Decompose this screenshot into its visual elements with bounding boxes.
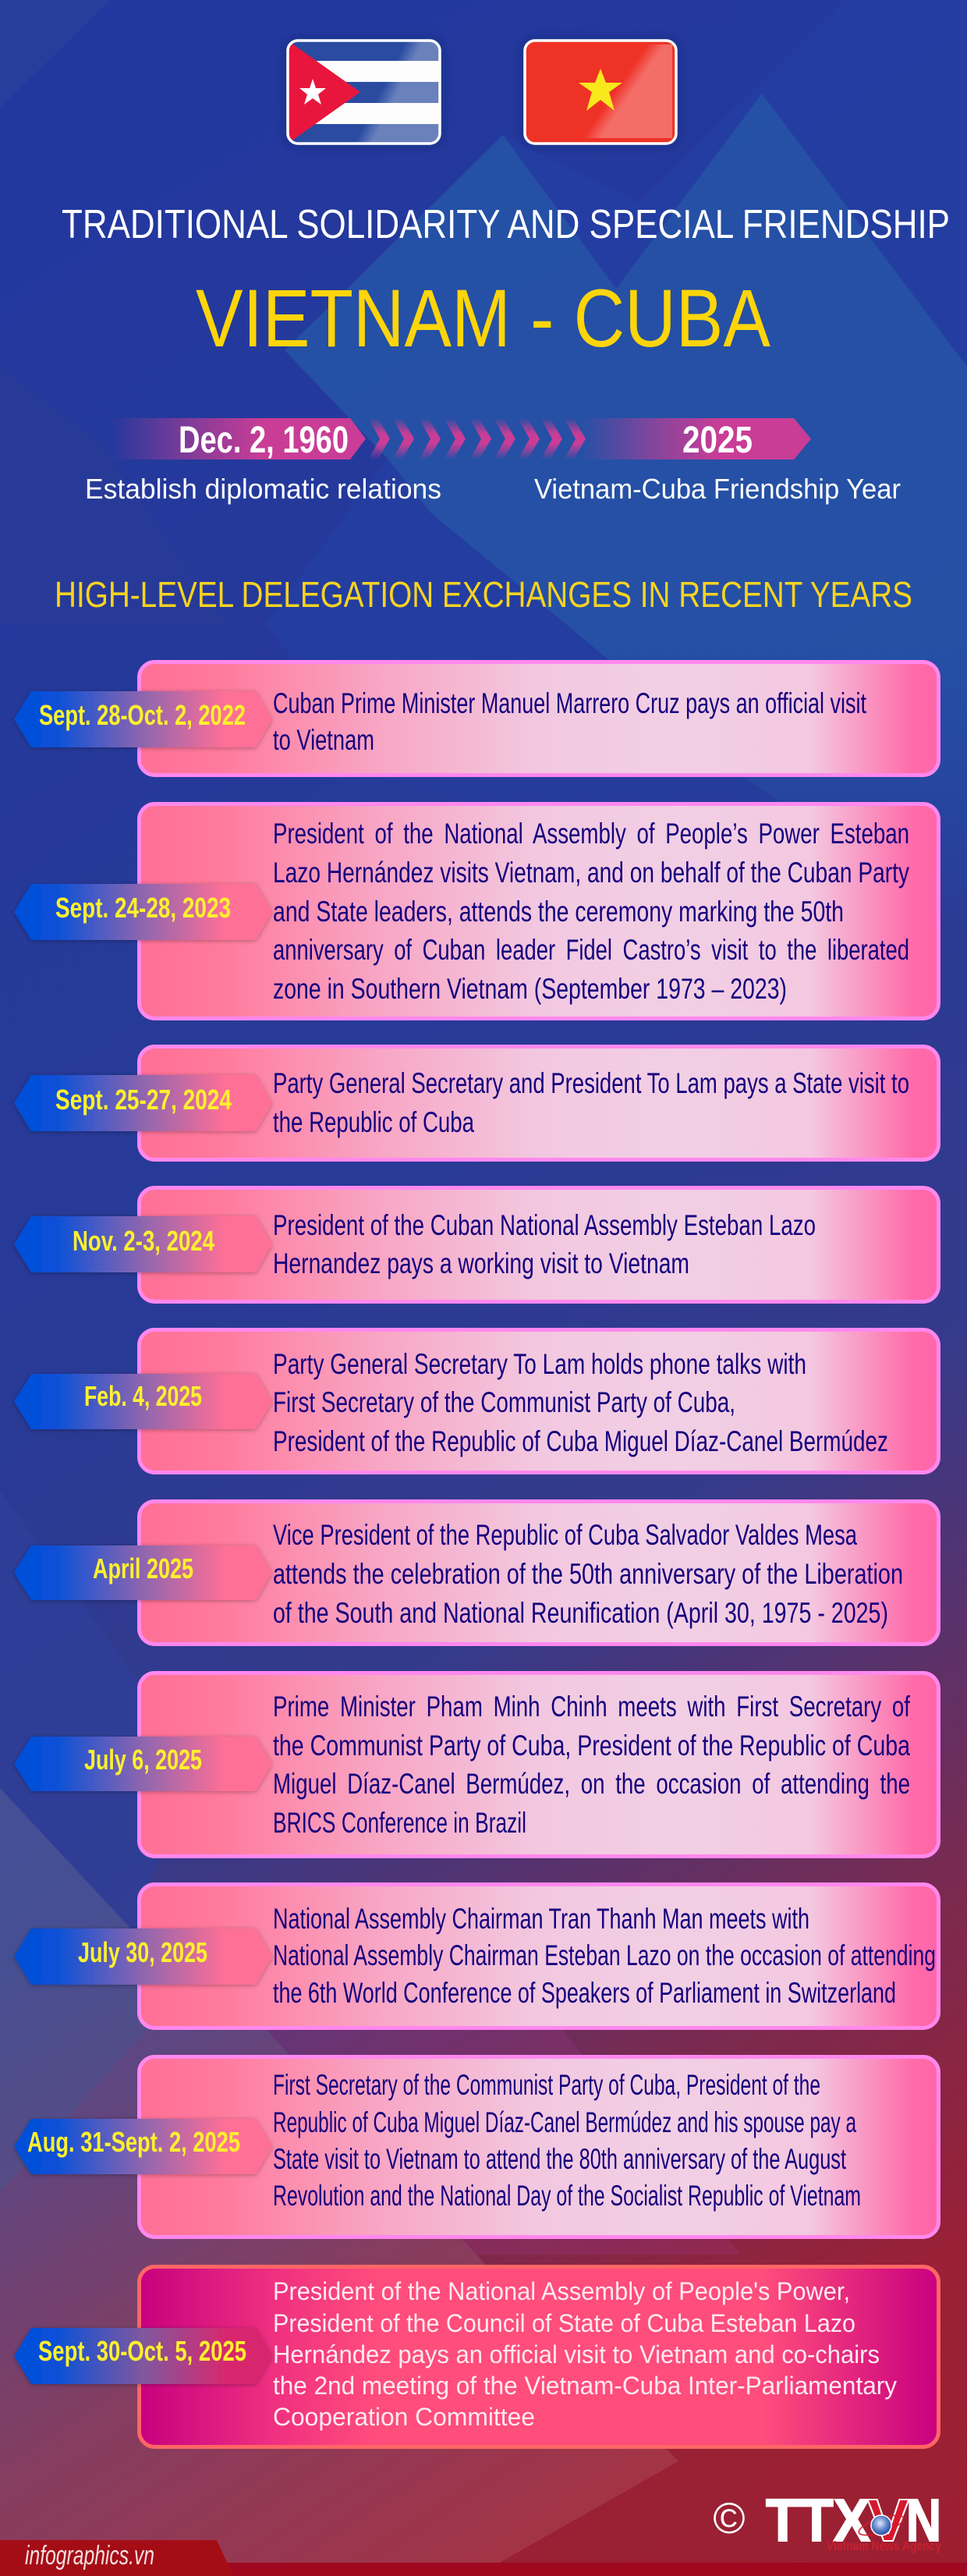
chevron arrows xyxy=(369,419,586,459)
logo: copyright TTXVN: Vietnam News Agency xyxy=(827,2539,941,2553)
description: President of the National Assembly of People's Power, xyxy=(273,2277,850,2305)
description: to Vietnam xyxy=(273,724,374,756)
description: President of the Council of State of Cuba Esteban Lazo xyxy=(273,2309,855,2337)
date tag: Sept. 30-Oct. 5, 2025 xyxy=(38,2335,246,2367)
description xyxy=(273,2277,897,2431)
event: Sept. 28-Oct. 2, 2022 xyxy=(14,662,939,775)
date tag xyxy=(14,1216,272,1272)
description xyxy=(273,1691,911,1839)
description xyxy=(273,1519,903,1629)
date tag xyxy=(14,1374,272,1429)
arrow: Dec. 2, 1960: Dec. 2, 1960 xyxy=(179,420,349,461)
date tag: Sept. 24-28, 2023 xyxy=(55,892,231,924)
description: Cooperation Committee xyxy=(273,2403,535,2431)
event: Sept. 25-27, 2024 xyxy=(14,1047,939,1159)
date tag: Feb. 4, 2025 xyxy=(84,1380,202,1412)
description xyxy=(273,1348,888,1457)
description xyxy=(273,687,867,756)
description xyxy=(273,818,909,1005)
logo: copyright TTXVN: TTX xyxy=(766,2487,870,2554)
date tag xyxy=(14,1928,272,1985)
event: Aug. 31-Sept. 2, 2025 xyxy=(14,2056,939,2237)
event: July 30, 2025 xyxy=(14,1885,939,2028)
arrow: 2025: 2025 xyxy=(682,420,753,461)
date tag xyxy=(14,691,272,747)
logo: copyright TTXVN: N xyxy=(906,2487,941,2554)
date tag xyxy=(14,1075,272,1131)
date tag xyxy=(14,1545,272,1600)
description: zone in Southern Vietnam (September 1973 – 2023) xyxy=(273,973,787,1005)
footer bar xyxy=(0,2540,967,2576)
event: Sept. 30-Oct. 5, 2025 (highlighted) xyxy=(14,2267,939,2446)
event: Nov. 2-3, 2024 xyxy=(14,1187,939,1301)
date tag: July 6, 2025 xyxy=(84,1744,202,1776)
date tag: Sept. 28-Oct. 2, 2022 xyxy=(39,699,246,731)
description: BRICS Conference in Brazil xyxy=(273,1807,526,1839)
date tag xyxy=(14,1737,272,1791)
source credit: infographics.vn xyxy=(25,2541,154,2571)
description: the 2nd meeting of the Vietnam-Cuba Inter-Parliamentary xyxy=(273,2372,897,2400)
event: April 2025 xyxy=(14,1501,939,1645)
label: friendship year: Vietnam-Cuba Friendship Year xyxy=(534,473,901,505)
date tag xyxy=(14,2328,272,2384)
date tag xyxy=(14,2119,272,2174)
description: First Secretary of the Communist Party of Cuba, xyxy=(273,1386,735,1418)
arrow: Dec. 2, 1960 xyxy=(111,418,366,461)
title: Vietnam - Cuba: VIETNAM - CUBA xyxy=(196,273,770,364)
date tag: Nov. 2-3, 2024 xyxy=(73,1225,214,1257)
event: Sept. 24-28, 2023 xyxy=(14,804,939,1019)
icon: Vietnamese flag xyxy=(525,41,676,144)
date tag: Sept. 25-27, 2024 xyxy=(55,1084,232,1116)
arrow: 2025 xyxy=(581,418,811,461)
label: establish relations: Establish diplomatic relations xyxy=(85,473,441,505)
date tag xyxy=(14,884,272,940)
logo: copyright TTXVN: © xyxy=(713,2493,746,2542)
description xyxy=(273,1903,936,2009)
description: Hernández pays an official visit to Vietnam and co-chairs xyxy=(273,2340,880,2368)
event: July 6, 2025 xyxy=(14,1673,939,1857)
description xyxy=(273,1067,909,1138)
timeline band: 1960 to 2025 xyxy=(85,418,901,505)
icon: Cuban flag xyxy=(288,41,440,144)
description xyxy=(273,2069,861,2212)
description xyxy=(273,1209,816,1279)
description: the Republic of Cuba xyxy=(273,1106,474,1138)
date tag: April 2025 xyxy=(93,1552,193,1584)
logo: copyright TTXVN: V xyxy=(867,2487,909,2554)
description: Hernandez pays a working visit to Vietnam xyxy=(273,1247,689,1279)
date tag: July 30, 2025 xyxy=(78,1936,207,1968)
description: Party General Secretary To Lam holds phone talks with xyxy=(273,1348,806,1380)
logo: copyright TTXVN xyxy=(713,2487,941,2554)
event: Feb. 4, 2025 xyxy=(14,1329,939,1473)
date tag: Aug. 31-Sept. 2, 2025 xyxy=(27,2126,240,2158)
